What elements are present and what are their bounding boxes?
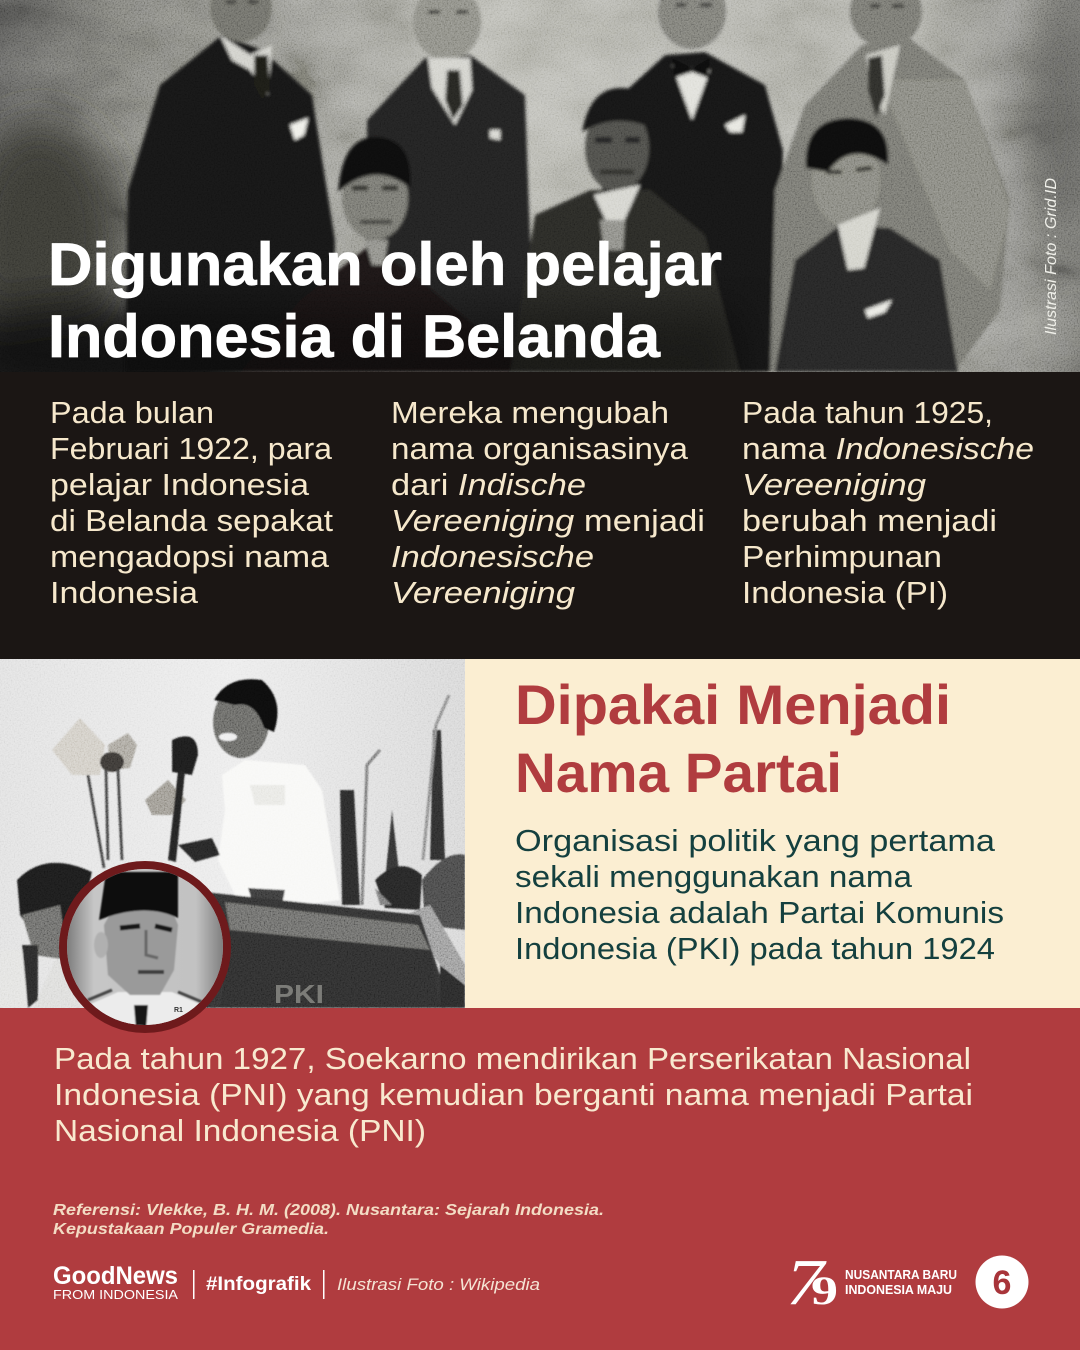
title: Digunakan oleh pelajar Indonesia di Belanda: Digunakan oleh pelajar [48,231,722,298]
text: first party to use the name: Organisasi politik yang pertama [515,823,996,858]
photo: orator at PKI rally [0,659,465,1009]
text column 2: dari Indische [391,467,586,502]
reference text [53,1202,604,1238]
seated centre [582,119,651,191]
left crowd head [16,862,93,925]
text column 1: Indonesia [50,575,199,610]
text column 2: nama organisasinya [391,431,689,466]
text column 3: Vereeniging [742,467,926,502]
text column 1 [50,395,333,610]
standing faces [210,0,272,42]
text: Soekarno founded PNI: Indonesia (PNI) yang kemudian berganti nama menjadi Partai [54,1077,973,1112]
footer: photo credit: Ilustrasi Foto : Wikipedia [337,1275,540,1294]
footer: anniversary slogan [845,1267,957,1297]
orator [218,760,340,905]
seated right [812,150,880,224]
bottom shade [0,292,758,372]
title: Digunakan oleh pelajar Indonesia di Belanda [48,231,722,370]
text: first party to use the name: sekali menggunakan nama [515,859,913,894]
footer: divider and hashtag: #Infografik [206,1274,311,1295]
heading: Dipakai Menjadi Nama Partai [515,673,951,804]
footer: 79th anniversary logo [786,1246,838,1319]
text column 1: Pada bulan [50,395,214,430]
heading: Dipakai Menjadi Nama Partai: Dipakai Menjadi [515,673,951,736]
footer: anniversary slogan: INDONESIA MAJU [845,1282,952,1297]
text column 3: Pada tahun 1925, [742,395,993,430]
text column 1: Februari 1922, para [50,431,333,466]
text column 3: berubah menjadi [742,503,997,538]
footer: GoodNews logo: GoodNews [53,1262,178,1290]
podium lettering: PKI [274,979,324,1009]
text: first party to use the name [515,823,1004,966]
right crowd [375,866,422,910]
text column 3 [742,395,1034,610]
podium [205,892,445,1008]
text column 2: Vereeniging [391,575,575,610]
microphones [52,718,105,775]
portrait: Soekarno [59,861,231,1035]
footer: divider and hashtag [193,1270,324,1299]
photo credit, vertical: Ilustrasi Foto : Grid.ID [1043,178,1060,335]
text column 3: Perhimpunan [742,539,942,574]
text column 2: Vereeniging menjadi [391,503,705,538]
footer: GoodNews logo [53,1262,178,1302]
footer: GoodNews logo: FROM INDONESIA [53,1287,178,1302]
flags and poles [340,790,360,905]
text: Soekarno founded PNI: Nasional Indonesia (PNI) [54,1113,426,1148]
text column 2: Indonesische [391,539,594,574]
text column 3: nama Indonesische [742,431,1034,466]
text column 1: mengadopsi nama [50,539,330,574]
reference text: Kepustakaan Populer Gramedia. [53,1221,329,1238]
text column 1: di Belanda sepakat [50,503,333,538]
text: first party to use the name: Indonesia (PKI) pada tahun 1924 [515,931,995,966]
page number badge [976,1256,1028,1308]
footer: anniversary slogan: NUSANTARA BARU [845,1267,957,1282]
pocket squares [290,118,308,140]
footer: 79th anniversary logo: 7 [786,1246,827,1319]
epaulette text: R1 [174,1007,183,1014]
text column 2: Mereka mengubah [391,395,669,430]
page number badge: 6 [993,1264,1011,1302]
seated left [342,156,408,240]
text column 1: pelajar Indonesia [50,467,310,502]
text: first party to use the name: Indonesia adalah Partai Komunis [515,895,1004,930]
photo: Indonesian students in the Netherlands [0,0,1080,372]
panel: dark text band [0,372,1080,659]
footer: 79th anniversary logo: 9 [811,1268,838,1313]
panel: red section [0,1008,1080,1350]
title: Digunakan oleh pelajar Indonesia di Belanda: Indonesia di Belanda [48,303,661,370]
text column 2 [391,395,705,610]
text: Soekarno founded PNI: Pada tahun 1927, Soekarno mendirikan Perserikatan Nasional [54,1041,971,1076]
text column 3: Indonesia (PI) [742,575,948,610]
heading: Dipakai Menjadi Nama Partai: Nama Partai [515,741,842,804]
reference text: Referensi: Vlekke, B. H. M. (2008). Nusantara: Sejarah Indonesia. [53,1202,604,1219]
collars and ties [220,35,272,95]
panel: cream section [465,659,1080,1008]
text: Soekarno founded PNI [54,1041,973,1148]
